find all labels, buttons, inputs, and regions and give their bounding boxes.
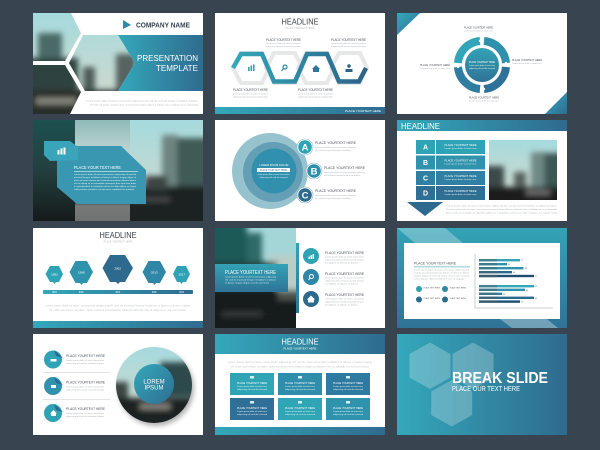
label 1: Lorem ipsum dolor sit amet consectetur xyxy=(266,42,301,45)
label 3: adipiscing elit sed do eiusmod tempor xyxy=(233,96,268,98)
item 3: Lorem ipsum dolor sit amet consectetur xyxy=(325,298,364,300)
box 4 xyxy=(230,398,274,420)
hexagon 1998 xyxy=(70,261,93,285)
badge B: B xyxy=(311,166,318,178)
label bottom xyxy=(469,96,500,102)
card body xyxy=(74,173,137,191)
legend icons: PLACE TEXT HERE xyxy=(450,286,467,290)
caption: Lorem ipsum dolor sit amet, consectetur adipiscing elit, sed do eiusmod tempor incididunt ut labore et dolore magna xyxy=(45,304,191,308)
caption: Ut enim ad minim veniam, quis nostrud exercitation ullamco laboris nisi ut aliquip ex ea commodo xyxy=(49,309,187,312)
band heading: PLACE YOURTEXT HERE xyxy=(225,270,277,276)
panel: photo slide with three items xyxy=(215,228,385,328)
photo xyxy=(489,140,557,200)
cycle ring xyxy=(458,41,506,89)
label top: Lorem ipsum dolor sit amet cons xyxy=(464,30,494,32)
box 4: PLACE YOURTEXT HERE xyxy=(237,407,267,410)
legend icons: PLACE TEXT HERE xyxy=(424,297,441,300)
text A: Lorem ipsum dolor sit amet consectetur adipiscing xyxy=(315,146,357,149)
label bottom: Lorem ipsum dolor sit amet cons xyxy=(469,100,500,102)
label right: PLACE YOURTEXT HERE xyxy=(512,58,542,62)
hexagon 1992: 1992 xyxy=(51,272,58,276)
hexagon 2017: 2017 xyxy=(178,272,185,276)
cover caption: Ut enim ad minim veniam, quis nostrud exercitation ullamco laboris nisi ut aliquip ex ea commodo xyxy=(90,104,199,106)
circle text: LOREM xyxy=(143,380,165,386)
panel: photo slide with text card xyxy=(33,120,203,221)
label 1: adipiscing elit sed do eiusmod tempor xyxy=(266,45,301,48)
row B: Lorem ipsum dolor sit amet cons xyxy=(444,162,477,166)
text B xyxy=(324,166,366,177)
photo: left section xyxy=(33,120,75,221)
photo xyxy=(215,228,296,328)
icon: bars xyxy=(248,64,255,71)
band body xyxy=(225,276,277,284)
hexagon 1992 xyxy=(46,266,63,284)
row C xyxy=(416,171,485,185)
item 2: Lorem ipsum dolor sit amet consectetur xyxy=(66,386,104,388)
label right xyxy=(512,58,543,65)
panel: hexagon process slide xyxy=(215,13,385,114)
item 2: adipiscing elit sed do eiusmod tempor xyxy=(66,388,104,392)
timeline bar: 40% xyxy=(115,291,121,294)
text A xyxy=(315,141,357,152)
item 1: PLACE YOURTEXT HERE xyxy=(325,251,364,255)
break title: BREAK SLIDE xyxy=(452,370,548,387)
timeline bar: 30% xyxy=(152,291,158,294)
item 3 xyxy=(44,404,105,422)
item 2: PLACE YOURTEXT HERE xyxy=(66,380,105,384)
text C xyxy=(315,189,357,200)
badge A xyxy=(297,139,313,155)
headline: HEADLINE xyxy=(282,18,318,26)
header band xyxy=(397,120,567,131)
tab xyxy=(44,141,78,161)
intro text: Ut enim ad minim veniam, quis nostrud exercitation ullamco laboris nisi ut aliquip ex ea commodo xyxy=(231,366,370,368)
box 1: PLACE YOURTEXT HERE xyxy=(237,382,267,385)
label 3 xyxy=(233,88,268,98)
photo: bottom left hexagon crop xyxy=(33,65,81,114)
label left: PLACE YOURTEXT HERE xyxy=(420,63,450,67)
panel: concentric circles slide xyxy=(215,120,385,221)
label 1: PLACE YOURTEXT HERE xyxy=(266,38,301,42)
caption xyxy=(446,204,558,214)
inner circle xyxy=(252,148,296,194)
caption: Lorem ipsum dolor sit amet, consectetur adipiscing elit, sed do eiusmod tempor incididunt ut labore xyxy=(446,204,558,208)
row B: B xyxy=(423,160,428,167)
bar chart xyxy=(475,254,553,308)
label 2 xyxy=(331,38,366,48)
band body: elit sed do eiusmod tempor incididunt ut labore xyxy=(225,278,277,282)
panel: items with large circle photo slide xyxy=(33,334,203,435)
intro text xyxy=(228,361,373,368)
company name: COMPANY NAME xyxy=(136,22,190,30)
caption: Ut enim ad minim veniam, quis nostrud exercitation ullamco laboris nisi ut aliquip ex ea commodo xyxy=(446,208,558,211)
cover subtitle: TEMPLATE xyxy=(156,63,198,73)
card heading: PLACE YOUR TEXT HERE xyxy=(74,165,121,170)
badge A: A xyxy=(302,142,309,154)
label left xyxy=(420,63,451,70)
item 2 xyxy=(44,377,105,395)
box 2 xyxy=(278,373,322,395)
label 4: adipiscing elit sed do eiusmod tempor xyxy=(298,96,333,98)
text band on photo xyxy=(215,264,288,292)
row A xyxy=(416,140,485,154)
sub headline: PLACE YOURTEXT HERE xyxy=(286,27,315,30)
box 2: adipiscing elit sed do eiusmod xyxy=(285,388,316,391)
card body: nulla pariatur excepteur sint occaecat cupidatat non proident xyxy=(74,188,134,191)
footer band xyxy=(33,321,203,328)
text C: Lorem ipsum dolor sit amet consectetur adipiscing xyxy=(315,194,357,197)
label 3: Lorem ipsum dolor sit amet consectetur xyxy=(233,92,268,96)
box text: PLACE YOUR TEXT HERE xyxy=(260,169,287,172)
card body: magna aliqua ut enim ad minim veniam quis nostrud xyxy=(414,274,470,278)
item 3: adipiscing elit sed do eiusmod tempor xyxy=(325,300,364,304)
text B: Lorem ipsum dolor sit amet consectetur adipiscing xyxy=(324,171,366,174)
bar chart: 97 xyxy=(535,276,537,278)
circle body: Lorem ipsum dolor sit amet consectetur xyxy=(258,173,290,176)
cover caption xyxy=(86,100,199,106)
hexagon 2013 xyxy=(142,261,166,285)
footer band xyxy=(215,107,385,114)
panel: bar chart slide xyxy=(397,228,567,328)
text B: PLACE YOURTEXT HERE xyxy=(324,166,365,170)
item 1: incididunt ut labore et dolore xyxy=(325,262,359,264)
box 2: PLACE YOURTEXT HERE xyxy=(285,382,315,385)
card body: enim ad minim veniam quis nostrud exercitation ullamco laboris xyxy=(74,179,137,182)
text C: PLACE YOURTEXT HERE xyxy=(315,189,356,193)
item 1 xyxy=(44,350,105,368)
label 2: PLACE YOURTEXT HERE xyxy=(331,38,366,42)
icon: bars xyxy=(58,148,66,154)
caption: Duis aute irure dolor in reprehenderit in voluptate velit esse cillum dolore eu fugiat nulla xyxy=(446,212,558,214)
band body: et dolore magna aliqua ut enim ad minim xyxy=(225,282,269,284)
footer text: PLACE YOURTEXT HERE xyxy=(345,109,381,113)
box 3 xyxy=(326,373,370,395)
item 3: adipiscing elit sed do eiusmod tempor xyxy=(66,415,104,418)
card body: Lorem ipsum dolor sit amet consectetur adipiscing elit sed do xyxy=(74,173,137,176)
cover caption: Lorem ipsum dolor sit amet, consectetur adipiscing elit, sed do eiusmod tempor incididunt ut labore xyxy=(86,100,199,102)
bar chart: 40 xyxy=(503,294,505,296)
headline: HEADLINE xyxy=(282,338,318,346)
label top: PLACE YOURTEXT HERE xyxy=(464,26,493,30)
middle circle xyxy=(243,142,303,202)
item 3: PLACE YOURTEXT HERE xyxy=(325,293,364,297)
bar chart: 80 xyxy=(525,268,527,270)
card heading: PLACE YOUR TEXT HERE xyxy=(414,262,457,266)
row C: C xyxy=(423,176,428,182)
label 1 xyxy=(266,38,301,48)
row D: Lorem ipsum dolor sit amet cons xyxy=(444,193,477,196)
cover title: PRESENTATION xyxy=(137,53,198,63)
sub headline: PLACE YOURTEXT HERE xyxy=(104,240,133,244)
panel: six box grid slide xyxy=(215,334,385,435)
panel: circular cycle slide xyxy=(397,13,567,114)
photo circle xyxy=(116,347,192,423)
arrow markers xyxy=(457,40,507,90)
outer circle xyxy=(232,133,308,209)
sub headline: PLACE YOURTEXT HERE xyxy=(284,346,317,350)
item 2: incididunt ut labore et dolore xyxy=(325,282,359,286)
card body: in reprehenderit in voluptate velit esse cillum dolore eu fugiat xyxy=(74,185,136,188)
row B xyxy=(416,156,485,170)
hexagons xyxy=(410,342,494,426)
circle body xyxy=(258,173,290,179)
box 1 xyxy=(230,373,274,395)
intro text: Lorem ipsum dolor sit amet, consectetur adipiscing elit, sed do eiusmod tempor incididunt ut labore et dolore magna xyxy=(228,361,373,364)
label 2: Lorem ipsum dolor sit amet consectetur xyxy=(331,42,366,45)
panel: timeline slide xyxy=(33,228,203,328)
centre text: Lorem ipsum dolor sit amet cons xyxy=(469,64,496,67)
white card xyxy=(404,243,560,319)
legend icons xyxy=(416,286,467,302)
photo: right section xyxy=(130,120,203,221)
decorative diagonal bottom xyxy=(500,319,558,328)
box 6: adipiscing elit sed do eiusmod xyxy=(333,413,364,416)
item 2: PLACE YOURTEXT HERE xyxy=(325,272,364,276)
card body: eiusmod tempor incididunt ut labore et dolore magna aliqua ut xyxy=(74,176,136,179)
badge C: C xyxy=(302,190,309,202)
icon: house xyxy=(312,65,320,72)
item 1: adipiscing elit sed do eiusmod tempor xyxy=(325,258,364,262)
item 1: adipiscing elit sed do eiusmod tempor xyxy=(66,362,104,365)
box 3: PLACE YOURTEXT HERE xyxy=(333,382,363,385)
headline: HEADLINE xyxy=(401,122,440,131)
row C: PLACE YOURTEXT HERE xyxy=(444,175,477,178)
badge B xyxy=(306,163,322,179)
centre circle xyxy=(465,48,499,82)
box 3: adipiscing elit sed do eiusmod xyxy=(333,388,364,391)
icon: company logo xyxy=(123,20,131,29)
bar chart: 60 xyxy=(513,272,515,274)
break subtitle: PLACE OUR TEXT HERE xyxy=(452,386,520,393)
legend icons: PLACE TEXT HERE xyxy=(424,286,441,290)
row D xyxy=(416,186,485,200)
photo: middle section xyxy=(75,120,130,221)
grey hexagons xyxy=(233,53,367,83)
card body: sed do eiusmod tempor incididunt ut labore et dolore xyxy=(414,272,470,274)
text A: PLACE YOURTEXT HERE xyxy=(315,141,356,145)
card body: exercitation ullamco laboris nisi ut aliquip xyxy=(414,278,465,280)
icon: person xyxy=(346,64,352,72)
row D: D xyxy=(423,190,428,198)
panel: cover slide xyxy=(33,13,203,114)
text C: elit sed do eiusmod tempor incididunt xyxy=(315,197,351,200)
centre text xyxy=(469,61,496,70)
timeline bar xyxy=(43,290,193,294)
footer band xyxy=(215,427,385,435)
teal snake line xyxy=(233,54,366,82)
label 2: adipiscing elit sed do eiusmod tempor xyxy=(331,45,366,48)
box 4: Lorem ipsum dolor sit amet cons xyxy=(237,410,268,413)
label right: Lorem ipsum dolor sit amet cons xyxy=(512,62,543,65)
item 1: Lorem ipsum dolor sit amet consectetur xyxy=(66,359,104,362)
row D: PLACE YOURTEXT HERE xyxy=(444,190,477,193)
box 1: Lorem ipsum dolor sit amet cons xyxy=(237,385,268,388)
legend icons: PLACE TEXT HERE xyxy=(450,297,467,300)
bar chart: 75 xyxy=(521,260,523,262)
hexagon 1998: 1998 xyxy=(78,270,85,274)
item 2: Lorem ipsum dolor sit amet consectetur xyxy=(325,276,364,280)
circle body: adipiscing elit sed do eiusmod xyxy=(260,176,288,179)
decorative diagonal top xyxy=(397,228,463,243)
caption xyxy=(45,304,191,312)
circle shadow xyxy=(118,350,194,426)
header band xyxy=(215,334,385,354)
bar chart: 85 xyxy=(526,290,528,292)
hexagon 2013: 2013 xyxy=(151,270,158,274)
icon: magnifier xyxy=(282,65,287,71)
item 3 xyxy=(303,291,364,307)
row C: Lorem ipsum dolor sit amet cons xyxy=(444,178,477,181)
teal title banner xyxy=(118,35,203,91)
row A: Lorem ipsum dolor sit amet cons xyxy=(444,147,477,150)
circle title: LOREM IPSUM DOLOR xyxy=(260,163,288,167)
panel: A B C D list slide xyxy=(397,120,567,221)
item 2: adipiscing elit sed do eiusmod tempor xyxy=(325,280,364,282)
photo: top left hexagon crop xyxy=(33,13,81,61)
centre text: PLACE YOURTEXT HERE xyxy=(469,61,495,64)
box 6 xyxy=(326,398,370,420)
card body: Lorem ipsum dolor sit amet consectetur adipiscing elit xyxy=(414,268,469,272)
bar chart: 50 xyxy=(508,264,510,266)
text B: elit sed do eiusmod tempor incididunt xyxy=(324,174,360,177)
card body: nisi ut aliquip ex ea commodo consequat duis aute irure dolor xyxy=(74,182,136,185)
badge C xyxy=(297,187,313,203)
centre text: adipiscing elit sed do eiusmod xyxy=(469,67,496,70)
item 2 xyxy=(303,269,364,286)
hexagon 2017 xyxy=(173,266,190,284)
timeline bar: 30% xyxy=(52,291,58,294)
box 6: Lorem ipsum dolor sit amet cons xyxy=(333,410,364,413)
bar chart: 75 xyxy=(521,302,523,304)
item 3: incididunt ut labore et dolore xyxy=(325,304,359,306)
box 4: adipiscing elit sed do eiusmod xyxy=(237,413,268,416)
row B: PLACE YOURTEXT HERE xyxy=(444,160,477,162)
label 4: PLACE YOURTEXT HERE xyxy=(298,88,333,92)
item 1: Lorem ipsum dolor sit amet consectetur xyxy=(325,256,364,258)
box 2: Lorem ipsum dolor sit amet cons xyxy=(285,385,316,388)
text card xyxy=(57,146,146,204)
box 3: Lorem ipsum dolor sit amet cons xyxy=(333,385,364,388)
label bottom: PLACE YOURTEXT HERE xyxy=(469,96,499,100)
label 4 xyxy=(298,88,333,98)
box 5: PLACE YOURTEXT HERE xyxy=(285,407,315,410)
box 6: PLACE YOURTEXT HERE xyxy=(333,407,363,410)
item 3: PLACE YOURTEXT HERE xyxy=(66,407,105,411)
band body: Lorem ipsum dolor sit amet consectetur adipiscing xyxy=(225,276,277,278)
label 3: PLACE YOURTEXT HERE xyxy=(233,88,268,92)
item 1: PLACE YOURTEXT HERE xyxy=(66,354,105,358)
bar chart: 95 xyxy=(535,298,537,300)
circle text: IPSUM xyxy=(144,386,164,392)
label left: Lorem ipsum dolor sit amet cons xyxy=(420,67,451,70)
box 5: Lorem ipsum dolor sit amet cons xyxy=(285,410,316,413)
circle text xyxy=(143,380,165,392)
hexagon 2002: 2002 xyxy=(114,266,121,270)
timeline bar: 30% xyxy=(79,291,85,294)
inner circle xyxy=(134,364,174,404)
bar chart: 95 xyxy=(535,286,537,288)
panel: break slide xyxy=(397,334,567,435)
vertical accent bar xyxy=(296,243,299,313)
hexagon 2002 xyxy=(102,255,133,284)
box 1: adipiscing elit sed do eiusmod xyxy=(237,388,268,391)
box 5 xyxy=(278,398,322,420)
label 4: Lorem ipsum dolor sit amet consectetur xyxy=(298,92,333,96)
label top xyxy=(464,26,494,32)
white label box xyxy=(257,168,290,172)
photo: centre hexagon crop xyxy=(69,35,135,91)
headline: HEADLINE xyxy=(100,231,136,240)
card body xyxy=(414,268,470,280)
box 5: adipiscing elit sed do eiusmod xyxy=(285,413,316,416)
row A: PLACE YOURTEXT HERE xyxy=(444,144,477,147)
arrow down xyxy=(407,202,443,216)
timeline bar: 60% xyxy=(179,291,185,294)
corner top left xyxy=(397,13,420,35)
item 1 xyxy=(303,248,364,264)
corner bottom right xyxy=(545,92,567,114)
item 3: Lorem ipsum dolor sit amet consectetur xyxy=(66,412,104,415)
text A: elit sed do eiusmod tempor incididunt xyxy=(315,149,351,152)
row A: A xyxy=(423,144,428,152)
